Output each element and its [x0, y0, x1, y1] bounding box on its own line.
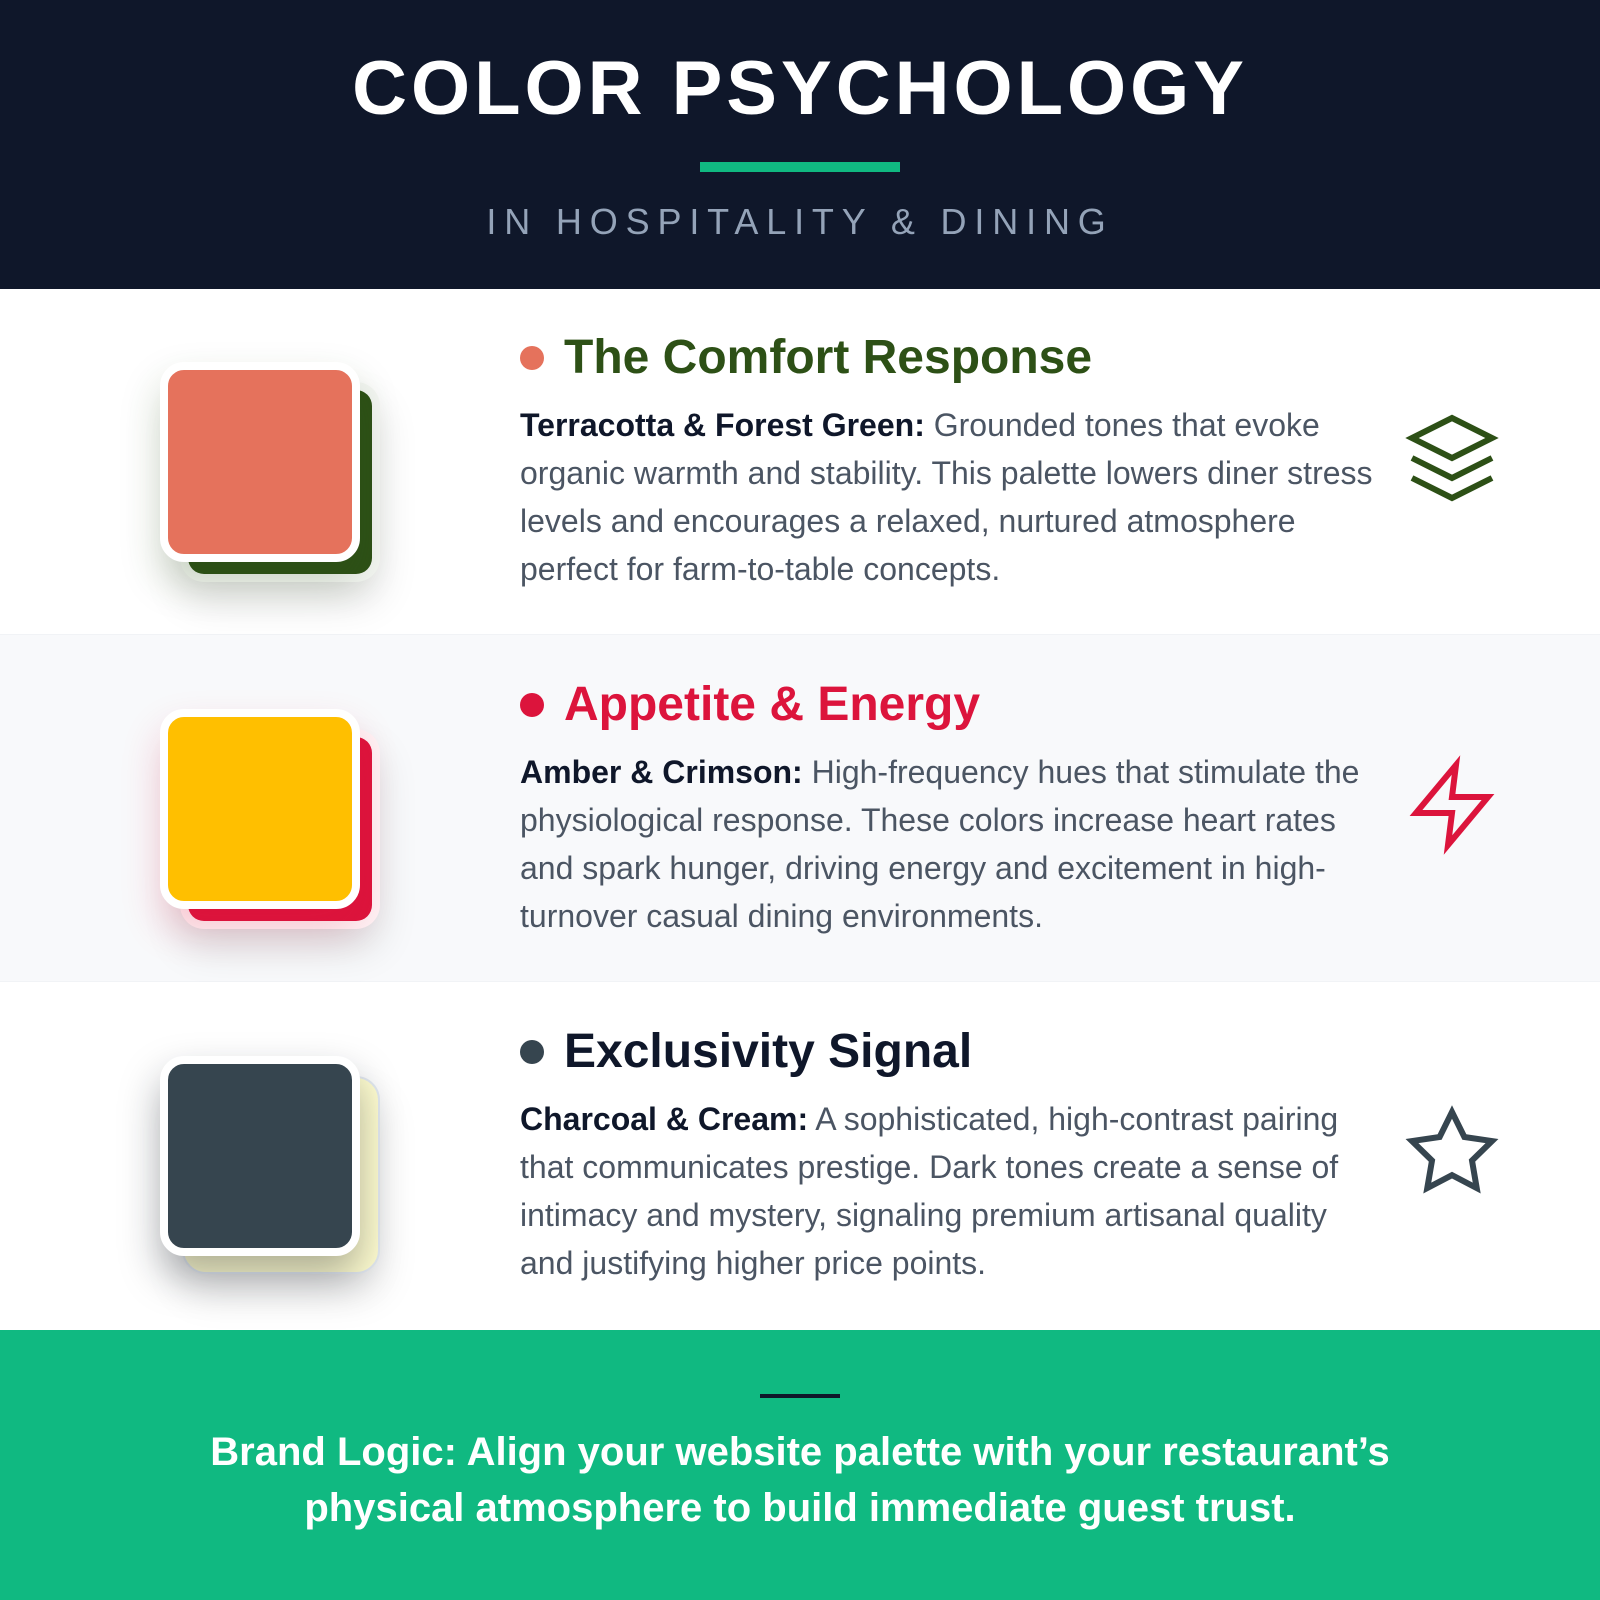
bullet dot [520, 346, 544, 370]
footer message: Brand Logic: Align your website palette with your restaurant’s [210, 1430, 1390, 1474]
footer band [0, 1330, 1600, 1600]
description: Amber & Crimson: High-frequency hues that stimulate the [520, 754, 1359, 790]
description [520, 407, 1373, 587]
panel: the comfort response [0, 289, 1600, 635]
heading: The Comfort Response [564, 331, 1092, 384]
footer accent bar [760, 1394, 840, 1398]
swatch back: crimson [180, 729, 380, 929]
swatch front: charcoal [160, 1056, 360, 1256]
description: levels and encourages a relaxed, nurtured atmosphere [520, 503, 1296, 539]
title accent bar [700, 162, 900, 172]
panel: appetite and energy [0, 635, 1600, 982]
description: perfect for farm-to-table concepts. [520, 551, 1000, 587]
title: COLOR PSYCHOLOGY [352, 46, 1248, 131]
swatch back: cream [182, 1076, 380, 1274]
panel: exclusivity signal [0, 982, 1600, 1330]
description: and spark hunger, driving energy and excitement in high- [520, 850, 1326, 886]
description: Charcoal & Cream: A sophisticated, high-contrast pairing [520, 1101, 1338, 1137]
description: intimacy and mystery, signaling premium artisanal quality [520, 1197, 1327, 1233]
description: that communicates prestige. Dark tones create a sense of [520, 1149, 1338, 1185]
icon: lightning bolt [1410, 755, 1494, 855]
colour swatch: amber and crimson [142, 717, 394, 962]
swatch front: amber [160, 709, 360, 909]
bullet dot [520, 693, 544, 717]
swatch front: terracotta [160, 362, 360, 562]
subtitle: IN HOSPITALITY & DINING [486, 201, 1114, 242]
colour swatch: terracotta and forest green [140, 370, 394, 616]
icon: layers [1405, 414, 1499, 502]
description: physiological response. These colors increase heart rates [520, 802, 1336, 838]
description: turnover casual dining environments. [520, 898, 1043, 934]
description: organic warmth and stability. This palette lowers diner stress [520, 455, 1373, 491]
swatch back: forest green [180, 382, 380, 582]
icon: star [1406, 1105, 1498, 1194]
footer message [210, 1430, 1390, 1530]
description: and justifying higher price points. [520, 1245, 986, 1281]
description [520, 1101, 1338, 1281]
description [520, 754, 1359, 934]
colour swatch: charcoal and cream [136, 1052, 395, 1311]
heading: Appetite & Energy [564, 678, 980, 731]
bullet dot [520, 1040, 544, 1064]
heading: Exclusivity Signal [564, 1025, 972, 1078]
header band [0, 0, 1600, 289]
description: Terracotta & Forest Green: Grounded tones that evoke [520, 407, 1320, 443]
footer message: physical atmosphere to build immediate guest trust. [304, 1486, 1296, 1530]
